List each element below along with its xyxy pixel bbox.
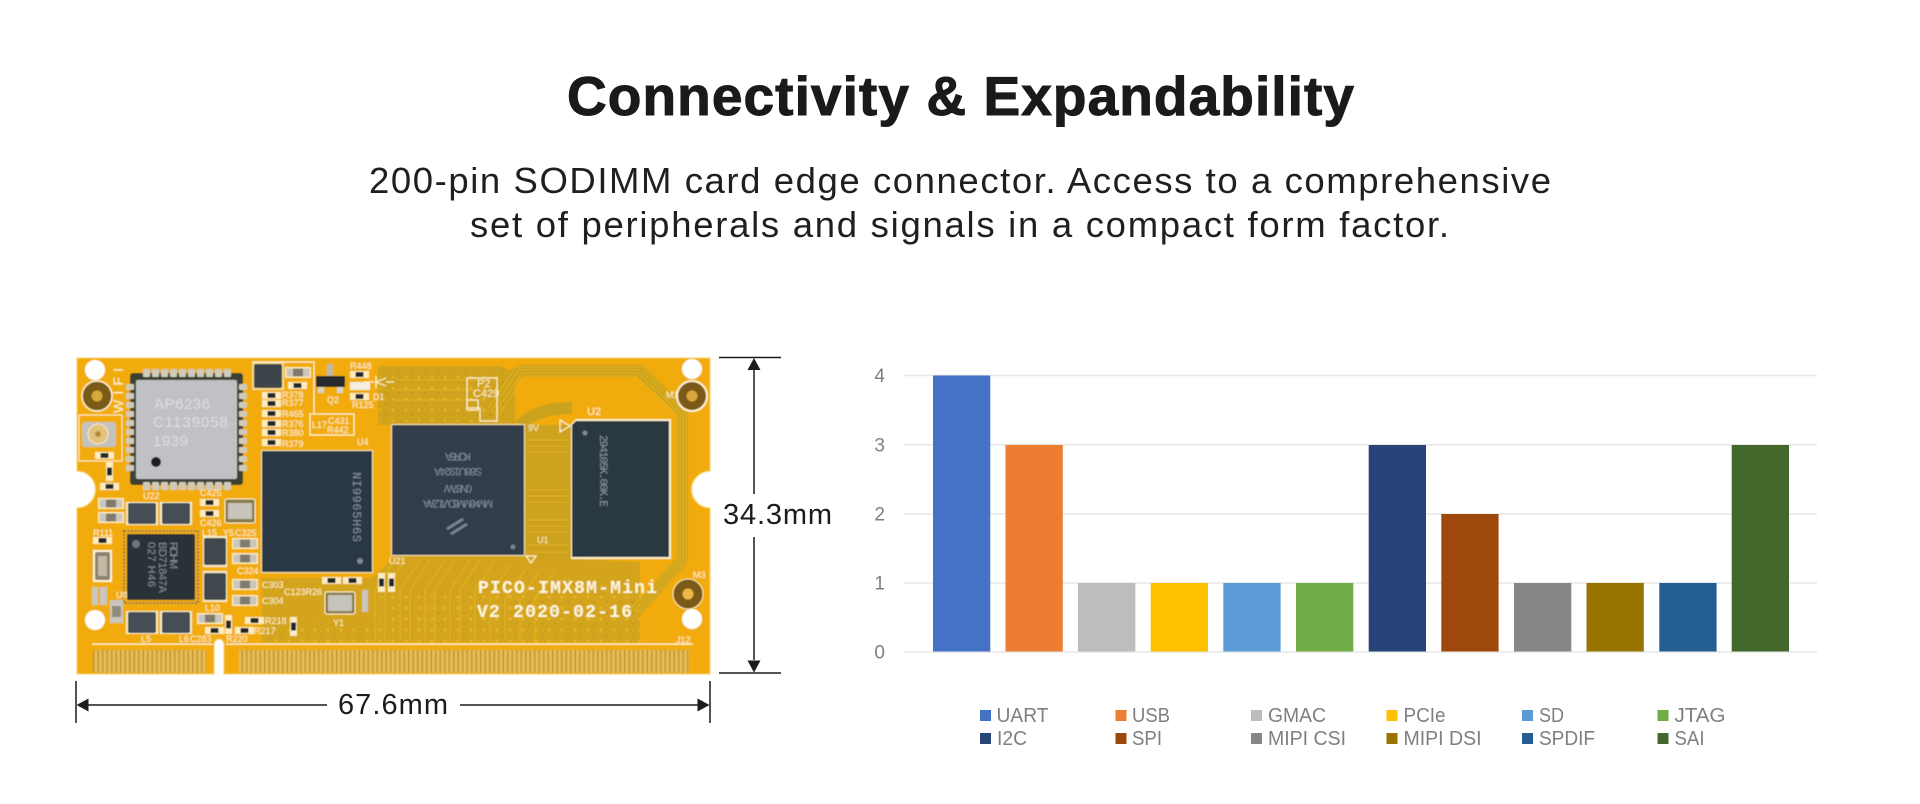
silkscreen component labels: C324	[237, 566, 259, 576]
inductors	[126, 362, 284, 634]
legend: PCIe	[1404, 705, 1446, 727]
subtitle text block	[369, 160, 1551, 245]
legend: JTAG	[1674, 705, 1726, 727]
silkscreen component labels: C325	[235, 528, 257, 538]
gold edge connector fingers	[92, 644, 693, 673]
y-axis labels: 1	[874, 574, 885, 594]
silkscreen component labels: C123R26	[284, 587, 322, 597]
Q2 transistor	[316, 364, 345, 393]
silkscreen component labels: M3	[693, 570, 706, 580]
silkscreen component labels: R217	[254, 626, 276, 636]
silkscreen component labels: L6	[179, 634, 189, 644]
silkscreen component labels: C429	[473, 388, 499, 400]
silkscreen component labels: Q2	[327, 395, 339, 405]
silkscreen component labels: 9V	[528, 423, 539, 433]
board substrate	[77, 358, 710, 674]
silkscreen component labels: R218	[265, 616, 287, 626]
silkscreen component labels: U4	[357, 437, 369, 447]
PMIC chip ROHM BD71847A: ROHM	[167, 542, 179, 569]
y-axis labels: 4	[874, 366, 885, 387]
legend: MIPI CSI	[1268, 728, 1346, 750]
silkscreen outlines	[252, 362, 570, 563]
silkscreen component labels: P2	[477, 378, 490, 390]
passive capacitors and resistors	[92, 367, 395, 636]
LPDDR4 memory package	[571, 419, 671, 559]
eMMC flash package: NI9965H6S	[349, 472, 363, 542]
legend: SPDIF	[1539, 728, 1595, 750]
bar chart: interface counts	[874, 366, 1817, 750]
dimension arrow: width 67.6mm	[76, 681, 710, 723]
silkscreen component labels: U21	[389, 556, 406, 566]
legend: SAI	[1674, 728, 1704, 750]
silkscreen component labels: L10	[205, 603, 220, 613]
silkscreen component labels: R465	[282, 409, 304, 419]
Wi-Fi module AP6236: AP6236	[154, 396, 210, 413]
silkscreen component labels: C431	[328, 416, 350, 426]
board name silkscreen: V2 2020-02-16	[477, 603, 632, 623]
silkscreen component labels: R379	[282, 439, 304, 449]
SoC package i.MX 8M Mini: MIMX8MM6DVTLZAA	[422, 497, 493, 509]
PMIC chip ROHM BD71847A: 027 H46	[145, 542, 157, 587]
title: Connectivity & Expandability	[567, 65, 1354, 127]
silkscreen component labels: C303	[262, 580, 284, 590]
silkscreen component labels: J12	[676, 635, 691, 645]
SoC package i.MX 8M Mini: KOREA	[444, 450, 471, 462]
silkscreen component labels: R125	[352, 400, 374, 410]
PMIC chip ROHM BD71847A: BD71847A	[156, 542, 168, 594]
silkscreen component labels: U22	[143, 491, 160, 501]
Wi-Fi module AP6236	[126, 369, 247, 490]
PMIC chip ROHM BD71847A	[124, 531, 198, 603]
silkscreen component labels: C283	[190, 634, 212, 644]
silkscreen component labels: C304	[262, 596, 284, 606]
U.FL antenna connector	[79, 415, 122, 461]
silkscreen component labels: U1	[537, 535, 549, 545]
legend	[980, 705, 1726, 750]
SoC package i.MX 8M Mini	[391, 424, 525, 556]
y-axis labels	[874, 366, 885, 664]
legend: SD	[1539, 705, 1564, 727]
subtitle text block: set of peripherals and signals in a compact form factor.	[470, 204, 1449, 245]
silkscreen component labels: Y5	[223, 528, 234, 538]
panel: PICO-IMX8M-Mini circuit board photo	[77, 358, 710, 674]
dimension arrow: height 34.3mm: 34.3mm	[723, 499, 832, 531]
legend: USB	[1132, 705, 1170, 727]
eMMC flash package	[261, 450, 373, 573]
silkscreen component labels: L15	[202, 528, 217, 538]
legend: GMAC	[1268, 705, 1326, 727]
silkscreen component labels: M1	[666, 390, 679, 400]
dimension arrow: width 67.6mm: 67.6mm	[338, 689, 448, 721]
Wi-Fi module AP6236: C1139058	[153, 414, 228, 431]
silkscreen component labels: C426	[200, 518, 222, 528]
silkscreen component labels: R377	[282, 398, 304, 408]
silkscreen component labels: R448	[350, 361, 372, 371]
SoC package i.MX 8M Mini: 0N87W	[443, 482, 472, 494]
silkscreen component labels: D1	[373, 392, 385, 402]
mounting holes	[82, 359, 707, 630]
y-axis labels: 2	[874, 504, 885, 526]
board name silkscreen	[477, 579, 657, 623]
silkscreen component labels: Y1	[333, 618, 344, 628]
silkscreen component labels: C425	[200, 488, 222, 498]
silkscreen component labels: R376	[282, 419, 304, 429]
silkscreen component labels: R380	[282, 428, 304, 438]
legend: MIPI DSI	[1404, 728, 1482, 750]
board name silkscreen: PICO-IMX8M-Mini	[478, 579, 657, 599]
silkscreen component labels: R442	[327, 425, 349, 435]
Wi-Fi module AP6236: 1939	[153, 433, 188, 450]
crystals	[93, 499, 355, 614]
legend: SPI	[1132, 728, 1162, 750]
silkscreen component labels: U2	[587, 406, 601, 418]
silkscreen component labels: L17	[312, 420, 327, 430]
silkscreen component labels: WIFI	[110, 368, 126, 413]
SoC package i.MX 8M Mini: S88U1924A	[433, 465, 482, 477]
bars	[933, 376, 1789, 652]
legend: UART	[996, 705, 1048, 727]
y-axis gridlines	[904, 376, 1817, 652]
legend: I2C	[997, 728, 1027, 750]
olive copper trace areas	[262, 366, 686, 642]
silkscreen component labels: L5	[141, 634, 151, 644]
LPDDR4 memory package: 294105K.00K.E	[596, 435, 608, 507]
silkscreen component labels: R378	[282, 390, 304, 400]
y-axis labels: 0	[874, 642, 885, 664]
silkscreen component labels: R111	[93, 528, 113, 538]
y-axis labels: 3	[874, 436, 885, 456]
silkscreen component labels	[93, 361, 706, 645]
dimension arrow: height 34.3mm	[719, 358, 832, 673]
silkscreen component labels: R220	[226, 634, 248, 644]
subtitle text block: 200-pin SODIMM card edge connector. Access to a comprehensive	[369, 160, 1551, 201]
silkscreen component labels: U8	[116, 590, 128, 600]
